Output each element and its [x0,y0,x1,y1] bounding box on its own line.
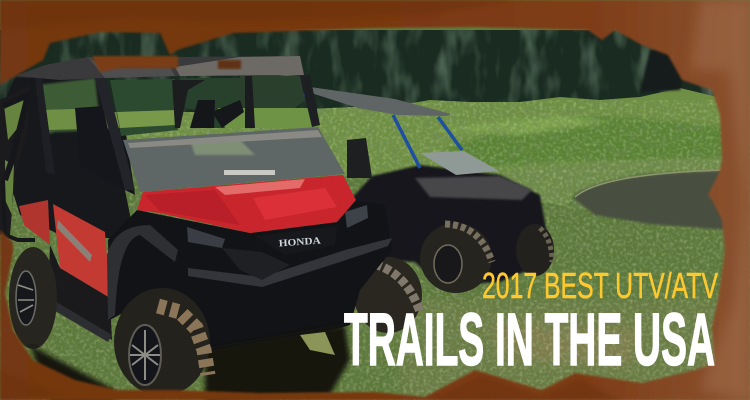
black UTV right wheel [516,224,554,276]
front wheel [114,288,210,396]
cab frame and dark interior [0,76,135,240]
roof pillars [300,75,320,127]
HONDA badge: HONDA [278,235,322,249]
forest tree line [0,30,740,115]
roof mud patches [92,56,178,72]
fender [107,225,178,320]
roof [15,56,304,80]
pond [573,171,730,230]
foot step [45,297,112,342]
title [344,265,718,381]
bumper [188,238,392,287]
shrub band [445,116,730,168]
rear wheel [9,247,57,349]
red UTV [0,56,422,400]
grass tuft [300,332,335,355]
red hood [137,175,356,233]
black door lower trim [48,245,112,340]
black UTV body [350,165,548,285]
grille [255,226,337,255]
dark under-body shadow [30,325,350,400]
rear bars [3,180,35,240]
grass texture [0,100,750,400]
headlight [187,227,225,248]
side red panels [19,200,50,245]
bank strip [500,157,730,220]
black UTV roof [308,87,451,116]
windshield [123,127,345,192]
upper meadow [0,85,730,180]
black UTV in background [250,87,554,293]
second front tyre [354,257,422,333]
foreground grass [0,170,730,400]
rear opening to trees [110,79,178,136]
blue roll bars [250,88,462,168]
black front body [108,200,392,360]
black UTV windshield [420,151,499,175]
black UTV front wheel [420,223,492,293]
